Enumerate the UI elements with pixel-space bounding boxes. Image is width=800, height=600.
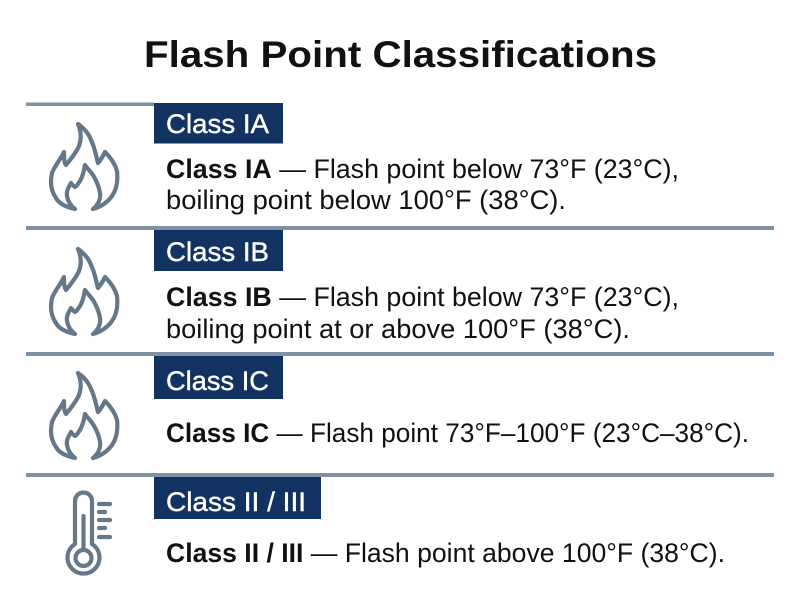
header: Class IB: Class IB bbox=[166, 237, 269, 267]
header: Class II / III: Class II / III bbox=[166, 487, 306, 517]
icon: flame Class IA bbox=[51, 124, 117, 209]
header: Class IA: Class IA bbox=[166, 109, 269, 139]
text: Class IA description: Class IA — Flash point below 73°F (23°C), bbox=[166, 154, 679, 184]
text: Class IA description: boiling point below 100°F (38°C). bbox=[166, 185, 566, 215]
icon: flame Class IC bbox=[51, 373, 117, 458]
title: Flash Point Classifications bbox=[144, 34, 657, 75]
text: Class IA description bbox=[166, 154, 679, 215]
text: Class II / III description: Class II / III — Flash point above 100°F (38°C). bbox=[166, 538, 725, 568]
text: Class IB description: Class IB — Flash point below 73°F (23°C), bbox=[166, 282, 679, 312]
icon: flame Class IB bbox=[51, 249, 117, 334]
header: Class IB bbox=[154, 230, 283, 271]
header: Class IC: Class IC bbox=[166, 366, 269, 396]
header: Class II / III bbox=[154, 477, 321, 519]
text: Class IB description: boiling point at or above 100°F (38°C). bbox=[166, 314, 630, 344]
text: Class IB description bbox=[166, 282, 679, 344]
header: Class IA bbox=[154, 103, 283, 144]
text: Class IC description: Class IC — Flash point 73°F–100°F (23°C–38°C). bbox=[166, 418, 749, 448]
header: Class IC bbox=[154, 356, 283, 399]
icon: thermometer bbox=[68, 492, 110, 574]
